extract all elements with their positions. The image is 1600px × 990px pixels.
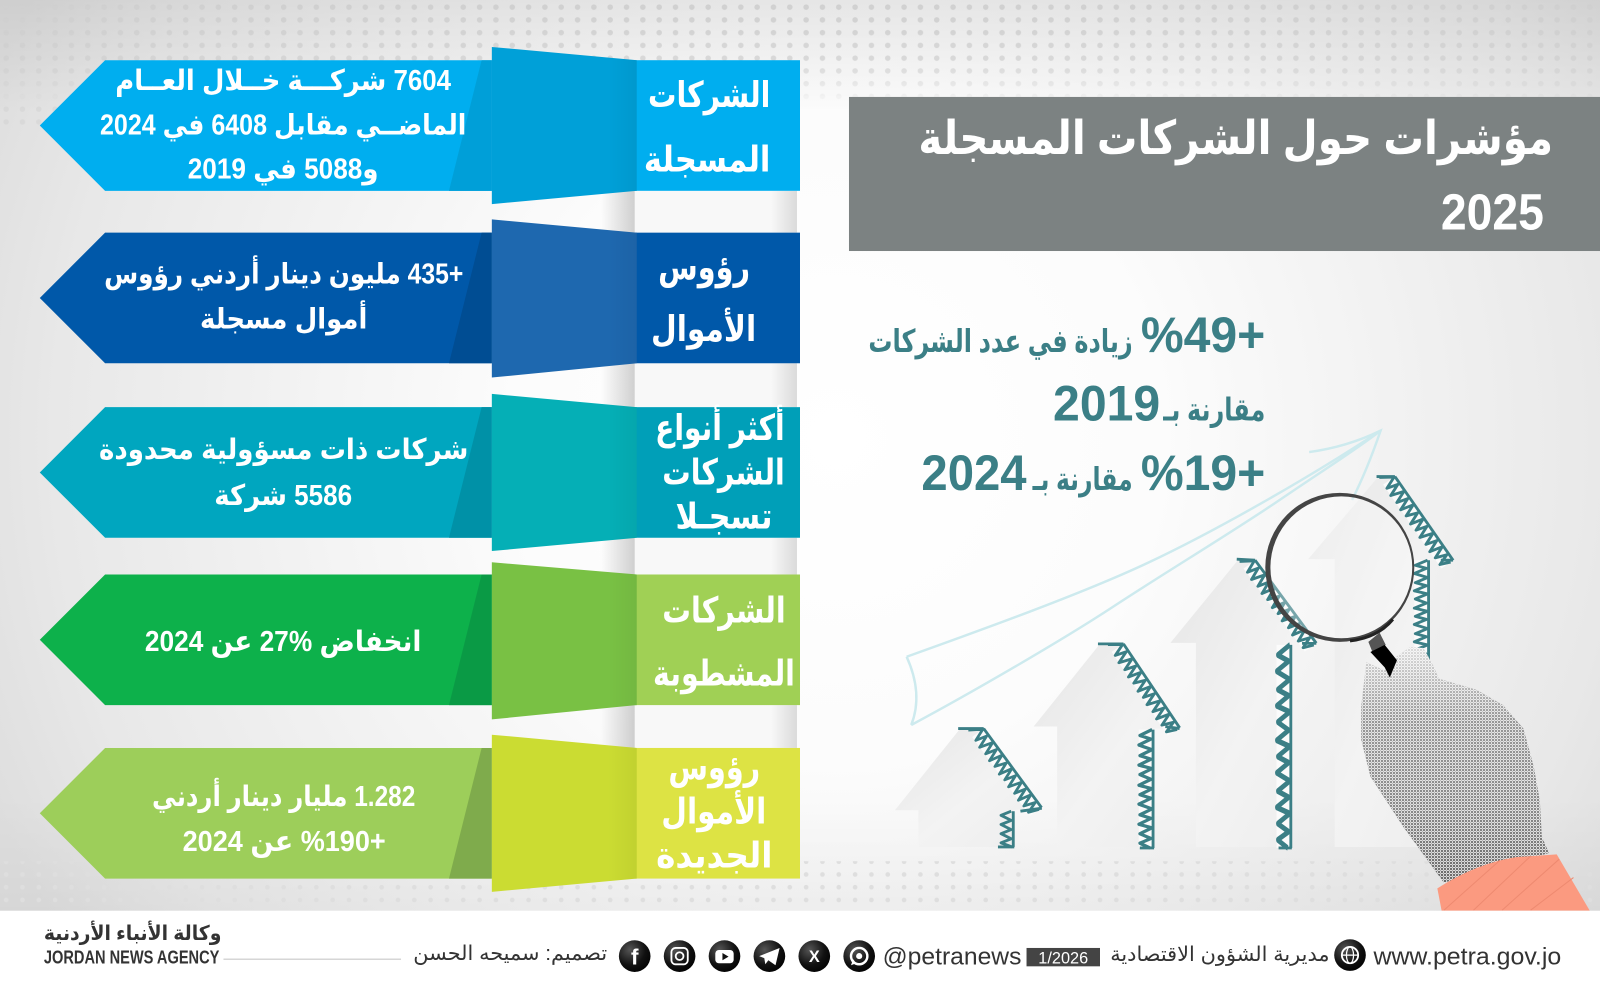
label row 3	[655, 404, 785, 537]
statistic: +49% compared to 2019: زيادة في عدد الشركات	[868, 323, 1133, 360]
label row 5: رؤوس	[668, 748, 760, 789]
label row 3: أكثر أنواع	[655, 404, 785, 449]
statistic: +19% compared to 2024: مقارنة بـ	[1032, 461, 1133, 498]
icon: whatsapp	[843, 940, 875, 972]
arrow 4	[1308, 470, 1453, 847]
hand	[1361, 647, 1549, 883]
detail text row 1: و5088 في 2019	[188, 154, 379, 186]
row 1: registered companies	[40, 47, 800, 204]
icon: X: X	[809, 948, 820, 966]
detail text row 1: 7604 شركـــة خــلال العــام	[115, 65, 451, 97]
agency logo: وكالة الأنباء الأردنية	[44, 919, 221, 945]
agency logo: JORDAN NEWS AGENCY	[44, 946, 219, 967]
detail text row 3: 5586 شركة	[214, 480, 352, 512]
statistic: +19% compared to 2024	[921, 445, 1265, 501]
magnifier	[1265, 493, 1414, 678]
detail text row 2: أموال مسجلة	[200, 301, 367, 336]
statistic: +19% compared to 2024: 2024	[921, 445, 1027, 501]
designer credit: تصميم: سميحه الحسن	[413, 943, 607, 965]
label row 3: تسجـلا	[676, 497, 772, 537]
date badge: 1/2026	[1038, 949, 1088, 967]
statistic: +49% compared to 2019	[868, 307, 1265, 431]
label row 5: الأموال	[661, 788, 766, 832]
detail text row 5: +%190 عن 2024	[183, 826, 386, 858]
row 5: new capital	[40, 735, 800, 892]
icon: globe	[1334, 939, 1366, 971]
arrow 3	[1170, 554, 1316, 848]
detail text row 4: انخفاض %27 عن 2024	[145, 626, 421, 658]
label row 1: الشركات	[648, 75, 770, 116]
label row 2: رؤوس	[658, 248, 750, 289]
detail text row 5: 1.282 مليار دينار أردني	[152, 778, 415, 813]
agency logo	[44, 919, 401, 967]
row 4: struck-off companies	[40, 562, 800, 719]
sleeve cuff	[1437, 854, 1590, 911]
statistic: +49% compared to 2019: 2019	[1053, 375, 1160, 431]
label row 2: الأموال	[651, 306, 756, 350]
icon: facebook: f	[631, 944, 639, 969]
row 3: most registered type	[40, 394, 800, 551]
statistic: +19% compared to 2024: +%19	[1141, 445, 1265, 501]
illustration: pale growth arrow	[907, 431, 1381, 725]
social handle: @petranews	[883, 943, 1021, 970]
detail text row 3	[99, 434, 468, 512]
row 2: capital	[40, 219, 800, 378]
icon: facebook	[619, 940, 651, 972]
icon: youtube	[709, 940, 740, 972]
label row 1: المسجلة	[644, 139, 770, 179]
footer	[0, 911, 1600, 990]
label row 5: الجديدة	[656, 835, 772, 875]
statistic: +49% compared to 2019: +%49	[1141, 307, 1265, 363]
illustration: hand holding magnifier	[1265, 493, 1590, 911]
detail text row 3: شركات ذات مسؤولية محدودة	[99, 434, 468, 466]
icon: X	[798, 940, 830, 972]
date badge	[1027, 948, 1100, 967]
label row 2	[651, 248, 756, 350]
label row 1	[644, 75, 770, 179]
icon: instagram	[664, 940, 695, 972]
website: www.petra.gov.jo	[1372, 943, 1561, 970]
detail text row 1: الماضــي مقابل 6408 في 2024	[100, 110, 466, 142]
department: مديرية الشؤون الاقتصادية	[1110, 944, 1330, 966]
label row 4: الشركات	[662, 590, 786, 631]
icon: telegram	[754, 940, 785, 972]
detail text row 1	[100, 65, 466, 186]
arrow 2	[1034, 637, 1180, 848]
panel: title	[849, 97, 1600, 251]
label row 5	[656, 748, 772, 875]
arrow 1	[895, 722, 1042, 847]
illustration: rising arrows chart	[895, 470, 1453, 848]
label row 3: الشركات	[662, 453, 785, 494]
label row 4	[653, 590, 795, 695]
heading year: 2025	[1441, 184, 1544, 241]
label row 4: المشطوبة	[653, 654, 795, 695]
detail text row 2: +435 مليون دينار أردني رؤوس	[104, 256, 463, 291]
statistic: +49% compared to 2019: مقارنة بـ	[1163, 391, 1265, 428]
row gaps shadows	[601, 191, 797, 748]
detail text row 5	[152, 778, 415, 858]
detail text row 2	[104, 256, 463, 336]
